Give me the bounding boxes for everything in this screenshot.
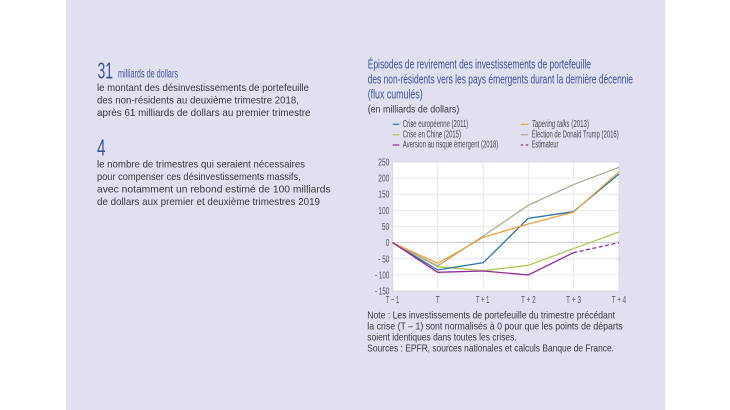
text block: note and sources: Note : Les investissements de portefeuille du trimestre précédant xyxy=(367,310,615,321)
heading: chart title: (flux cumulés) xyxy=(368,86,423,101)
y axis labels: - 150 xyxy=(375,286,390,298)
text block: second figure description: le nombre de trimestres qui seraient nécessaires xyxy=(97,159,305,171)
text block: second figure description: avec notamment un rebond estimé de 100 milliards xyxy=(97,183,331,195)
x axis labels: T + 3 xyxy=(566,295,581,306)
text block: first figure description xyxy=(97,82,311,119)
text block: note and sources xyxy=(367,310,623,355)
legend item: Aversion au risque émergent (2018): Aversion au risque émergent (2018) xyxy=(403,140,498,151)
series: Tapering talks (2013) xyxy=(392,172,619,263)
series: Estimateur xyxy=(573,243,619,253)
text block: second figure description: de dollars aux premier et deuxième trimestres 2019 xyxy=(97,196,320,208)
y axis labels: 0 xyxy=(386,238,390,249)
y axis labels: 250 xyxy=(378,158,390,168)
key figure: 31 milliards de dollars: 31 xyxy=(98,57,113,83)
panel: key figures xyxy=(97,57,331,208)
legend item: Estimateur: Estimateur xyxy=(532,140,559,151)
key figure: 31 milliards de dollars xyxy=(98,57,178,83)
key figure: 4: 4 xyxy=(97,134,106,160)
key figure: 31 milliards de dollars: milliards de dollars xyxy=(118,67,178,81)
text block: note and sources: Sources : EPFR, sources nationales et calculs Banque de France. xyxy=(367,344,614,355)
text block: first figure description: le montant des désinvestissements de portefeuille xyxy=(97,82,309,94)
legend item: Élection de Donald Trump (2016): Élection de Donald Trump (2016) xyxy=(532,127,619,140)
series: Crise européenne (2011) xyxy=(392,174,619,270)
heading: chart title: Épisodes de revirement des investissements de portefeuille xyxy=(368,56,591,71)
legend item: Crise européenne (2011) xyxy=(393,119,468,130)
series: Aversion au risque émergent (2018) xyxy=(392,243,573,275)
series: Élection de Donald Trump (2016) xyxy=(392,167,619,266)
heading: chart title xyxy=(368,56,633,101)
text block: note and sources: la crise (T – 1) sont normalisés à 0 pour que les points de départs xyxy=(367,321,623,332)
y axis labels xyxy=(375,158,390,298)
text block: first figure description: des non-résidents au deuxième trimestre 2018, xyxy=(97,94,299,106)
legend item: Aversion au risque émergent (2018) xyxy=(393,140,498,151)
x axis labels: T + 1 xyxy=(476,295,490,306)
y axis labels: - 100 xyxy=(375,270,390,281)
text block: second figure description xyxy=(97,159,331,208)
text block: note and sources: soient identiques dans toutes les crises. xyxy=(367,333,517,344)
x axis labels: T + 4 xyxy=(612,295,626,306)
x axis labels: T xyxy=(436,295,440,306)
text block: second figure description: pour compenser ces désinvestissements massifs, xyxy=(97,171,301,183)
unit label: (en milliards de dollars) xyxy=(368,104,459,115)
y axis labels: 150 xyxy=(378,190,390,201)
plot area xyxy=(392,162,619,291)
line chart xyxy=(375,158,626,306)
legend xyxy=(393,119,619,151)
text block: first figure description: après 61 milliards de dollars au premier trimestre xyxy=(97,107,311,119)
legend item: Crise européenne (2011): Crise européenne (2011) xyxy=(403,119,468,130)
legend item: Crise en Chine (2015) xyxy=(393,129,461,140)
legend item: Estimateur xyxy=(521,140,559,151)
legend item: Crise en Chine (2015): Crise en Chine (2015) xyxy=(403,129,461,140)
x axis labels: T + 2 xyxy=(521,295,536,306)
y axis labels: 50 xyxy=(382,222,390,233)
legend item: Tapering talks (2013): Tapering talks (2013) xyxy=(532,119,589,130)
y axis labels: 200 xyxy=(378,174,390,185)
x axis labels: T − 1 xyxy=(386,295,400,306)
legend item: Élection de Donald Trump (2016) xyxy=(521,127,619,140)
y axis labels: - 50 xyxy=(378,254,390,265)
x axis labels xyxy=(386,295,626,306)
series: Crise en Chine (2015) xyxy=(392,232,619,271)
y axis labels: 100 xyxy=(378,206,390,217)
